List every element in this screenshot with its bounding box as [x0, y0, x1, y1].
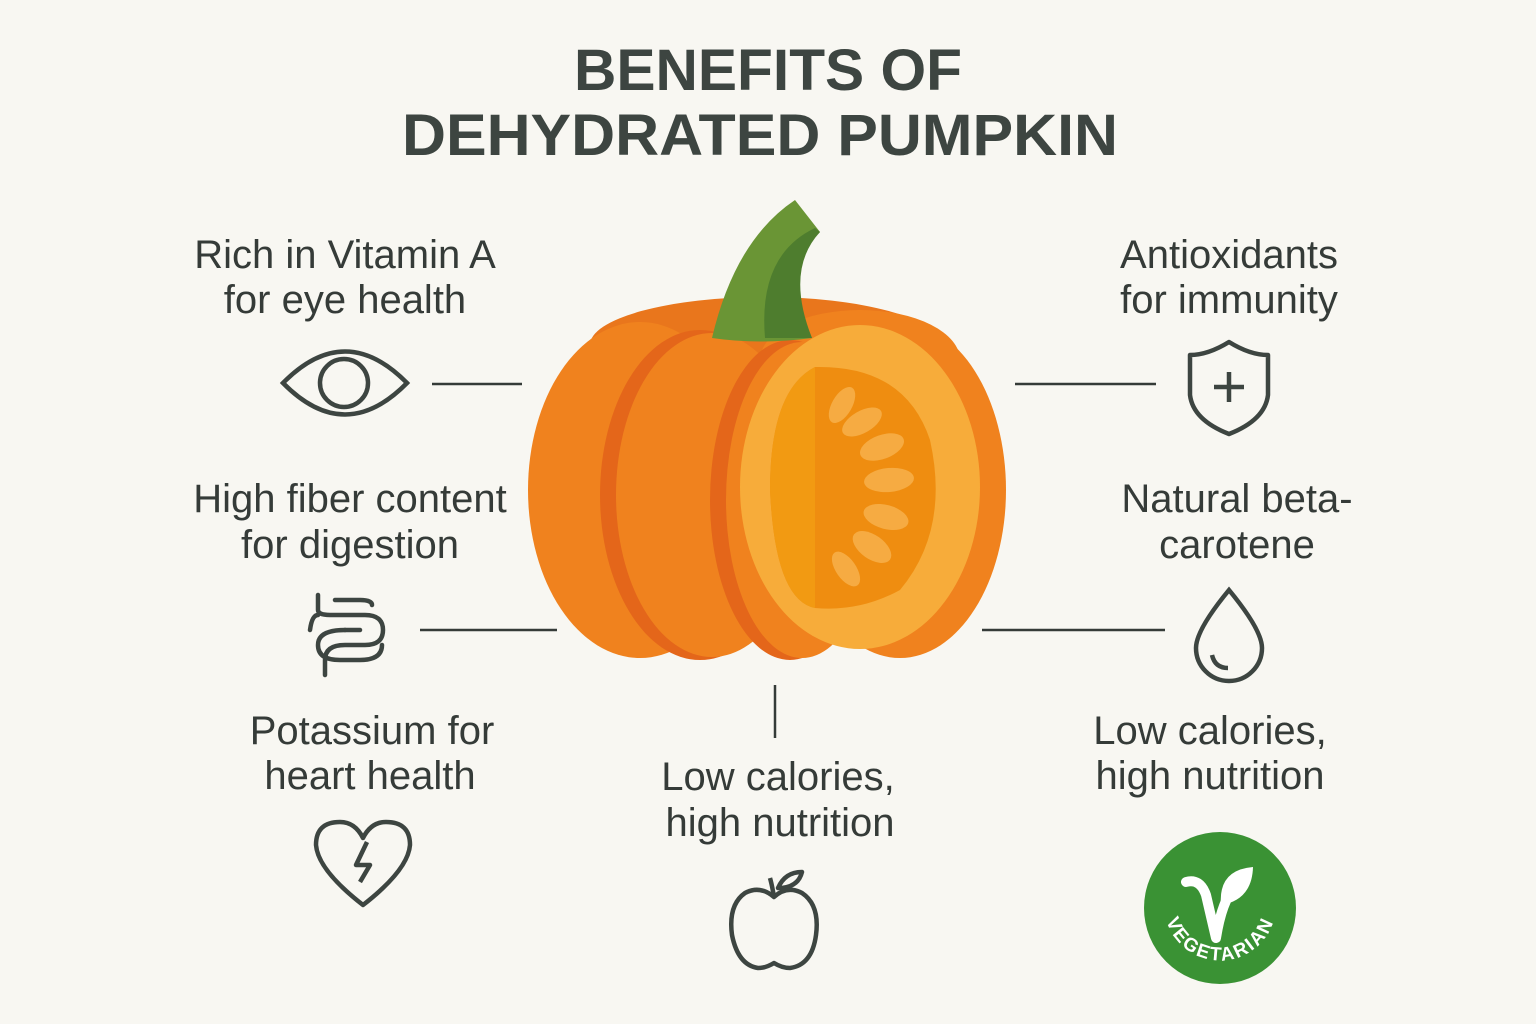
connector lines	[420, 384, 1165, 738]
label: antioxidants	[1120, 233, 1338, 322]
label: potassium: heart health	[264, 754, 476, 798]
icon: apple	[731, 872, 817, 968]
label: beta-carotene	[1121, 477, 1353, 567]
icon: shield	[1190, 342, 1268, 434]
label: potassium	[250, 709, 494, 798]
label: beta-carotene: carotene	[1159, 523, 1315, 567]
label: vitamin A: for eye health	[224, 278, 466, 322]
label: vitamin A	[194, 233, 496, 322]
icon: heart	[316, 822, 410, 905]
badge: vegetarian	[1144, 832, 1296, 984]
title: DEHYDRATED PUMPKIN	[402, 103, 1118, 168]
pumpkin illustration	[528, 200, 1006, 660]
label: antioxidants: for immunity	[1120, 278, 1338, 322]
label: low calories center: high nutrition	[665, 801, 895, 845]
label: low calories right: high nutrition	[1095, 754, 1325, 798]
cut face	[740, 325, 980, 649]
icon: eye	[283, 352, 407, 414]
label: fiber	[193, 477, 507, 567]
label: low calories center: Low calories,	[661, 755, 895, 799]
label: beta-carotene: Natural beta-	[1121, 477, 1353, 521]
stem	[712, 200, 820, 342]
title	[402, 38, 1118, 168]
title: BENEFITS OF	[574, 38, 962, 103]
label: low calories center	[661, 755, 895, 845]
label: low calories right: Low calories,	[1093, 709, 1327, 753]
badge: vegetarian: VEGETARIAN	[1168, 915, 1273, 961]
label: antioxidants: Antioxidants	[1120, 233, 1338, 277]
label: fiber: for digestion	[241, 523, 459, 567]
label: low calories right	[1093, 709, 1327, 798]
icon: drop	[1196, 590, 1262, 681]
label: vitamin A: Rich in Vitamin A	[194, 233, 496, 277]
label: potassium: Potassium for	[250, 709, 494, 753]
icon: intestine	[310, 595, 383, 675]
label: fiber: High fiber content	[193, 477, 507, 521]
